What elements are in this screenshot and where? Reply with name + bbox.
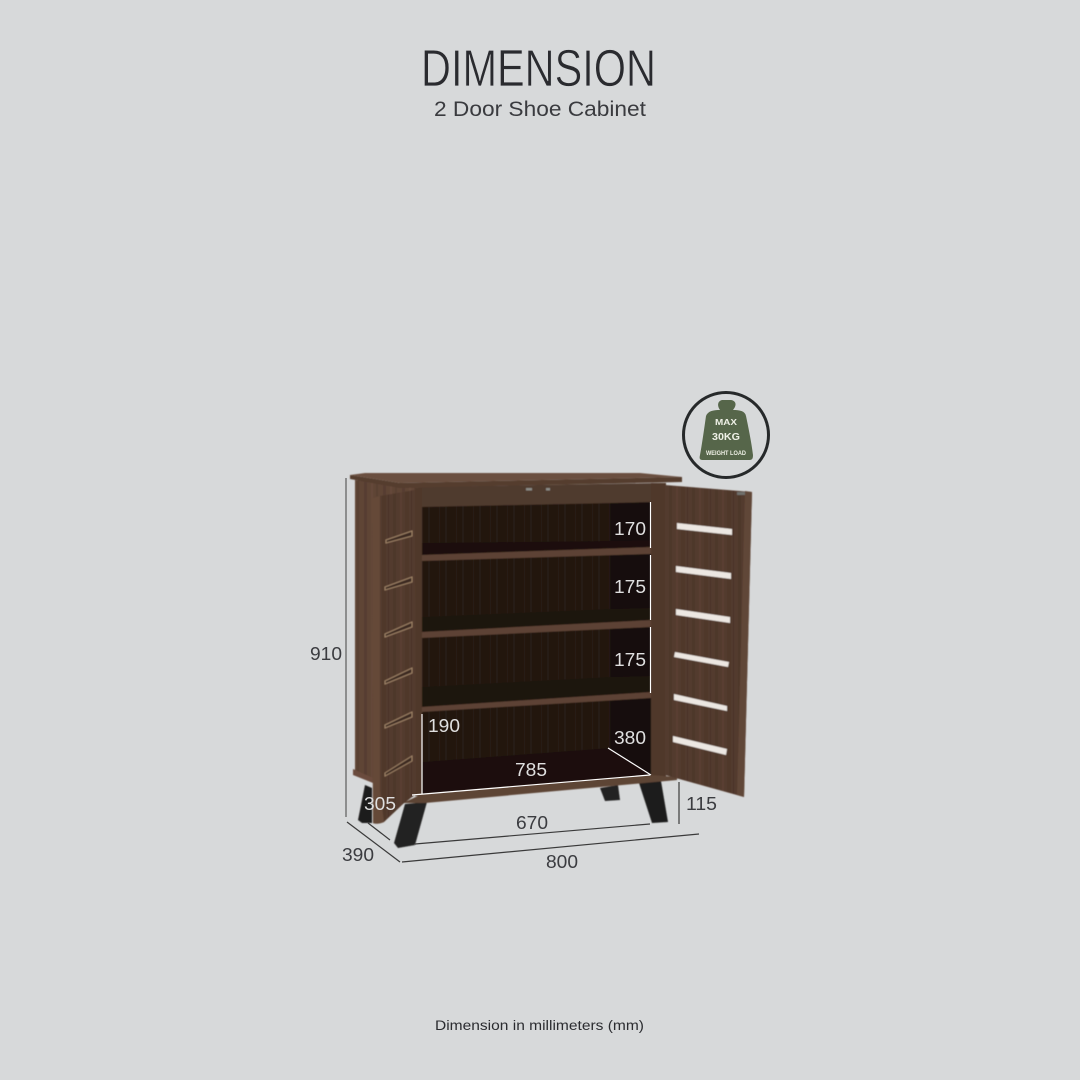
back left leg	[358, 785, 372, 823]
exterior dimension labels: 390	[342, 844, 374, 865]
side panel foot ledge	[353, 769, 373, 783]
exterior dimension labels: 670	[516, 812, 548, 833]
cabinet top slab	[350, 473, 682, 488]
interior dimension labels: 190	[428, 715, 460, 736]
shelf 2	[421, 608, 651, 638]
cabinet interior back wall	[421, 500, 651, 797]
right door edge strip	[737, 491, 752, 797]
interior dimension labels: 175	[614, 576, 646, 597]
exterior dimension labels	[310, 643, 717, 872]
left door lighter stile	[372, 496, 384, 824]
icon: weight	[700, 400, 753, 460]
shelf 1	[421, 540, 651, 561]
badge text: MAX	[715, 418, 738, 427]
front left leg	[394, 802, 427, 848]
front right leg	[639, 781, 668, 823]
right door	[665, 485, 752, 797]
left door	[372, 490, 416, 824]
white interior dimension lines	[412, 502, 651, 795]
interior dimension labels: 305	[364, 793, 396, 814]
weight load badge: 30KG	[712, 431, 740, 443]
bottom rail	[403, 775, 677, 803]
weight load badge: WEIGHT LOAD	[706, 451, 747, 457]
door hinge tag	[737, 492, 745, 495]
interior dimension labels: 170	[614, 518, 646, 539]
exterior dimension labels: 910	[310, 643, 342, 664]
left door slots	[385, 531, 412, 776]
exterior dimension labels: 800	[546, 851, 578, 872]
interior right wall	[610, 500, 651, 775]
cabinet floor	[421, 748, 651, 794]
right frame post	[651, 483, 666, 777]
interior dimension labels: 175	[614, 649, 646, 670]
interior dimension labels	[364, 518, 646, 814]
subtitle: 2 Door Shoe Cabinet	[434, 98, 646, 121]
latch hardware	[526, 488, 550, 490]
footer note: Dimension in millimeters (mm)	[435, 1018, 644, 1033]
badge ring	[684, 392, 768, 478]
interior dimension labels: 785	[515, 759, 547, 780]
left side panel	[355, 480, 422, 790]
weight load badge	[684, 392, 768, 478]
cabinet apron under top	[418, 483, 660, 507]
exterior dimension labels: 115	[686, 793, 717, 814]
interior dimension labels: 380	[614, 727, 646, 748]
right door slots	[673, 523, 732, 755]
left frame post	[415, 488, 422, 796]
dark exterior dimension lines	[346, 478, 699, 862]
back right leg	[600, 785, 620, 801]
shelf 3	[421, 676, 651, 712]
cabinet illustration	[350, 473, 752, 848]
title: DIMENSION	[421, 40, 656, 98]
